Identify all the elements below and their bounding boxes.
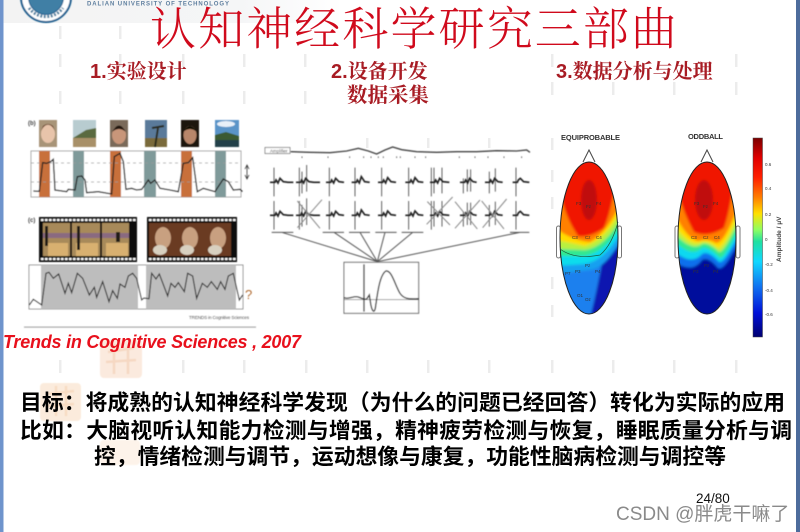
colour bar: -0.4	[765, 288, 773, 293]
figure b label: (b)	[28, 121, 36, 127]
university logo	[21, 0, 71, 22]
colour bar: 0.4	[765, 186, 772, 191]
colour bar: 0	[765, 237, 768, 242]
header band	[3, 0, 343, 23]
epoch verticals	[274, 165, 516, 230]
map title: equiprobable: EQUIPROBABLE	[561, 133, 620, 142]
citation: Trends in Cognitive Sciences , 2007	[3, 332, 302, 352]
electrodes: Fz	[703, 204, 709, 209]
step 3 heading: 3.数据分析与处理	[556, 59, 713, 83]
electrodes: C4	[714, 235, 720, 240]
electrodes: P3	[693, 269, 699, 274]
contour lines and electrodes: F3	[576, 201, 582, 206]
colour bar: 0.6	[765, 162, 772, 167]
panel: acquisition	[265, 147, 530, 313]
averaging lines	[272, 232, 529, 262]
colour bar: 0.2	[765, 212, 772, 217]
panel: experiment design	[24, 120, 256, 328]
colour bar: Amplitude / μV	[776, 216, 783, 262]
examples line 2: 控，情绪检测与调节，运动想像与康复，功能性脑病检测与调控等	[94, 444, 726, 469]
background watermark ticks	[59, 26, 738, 373]
goal line: 目标：将成熟的认知神经科学发现（为什么的问题已经回答）转化为实际的应用	[20, 390, 785, 415]
line chart b	[31, 151, 249, 197]
colour bar	[753, 138, 783, 337]
title: 认知神经科学研究三部曲	[150, 4, 677, 55]
electrodes: Cz	[703, 235, 709, 240]
electrodes: F3	[694, 201, 700, 206]
step 2 heading	[331, 60, 429, 107]
contour lines and electrodes: P3	[575, 269, 581, 274]
electrodes: P4	[713, 269, 719, 274]
electrodes: F4	[713, 201, 719, 206]
contour lines and electrodes: Cz	[585, 235, 591, 240]
averaged ERP	[344, 262, 419, 313]
source caption: TRENDS in Cognitive Sciences	[189, 315, 250, 320]
contour lines and electrodes: P7	[565, 271, 571, 276]
CSDN watermark: CSDN @胖虎干嘛了	[616, 503, 789, 525]
figure c label: (c)	[28, 218, 35, 224]
contour lines and electrodes: F4	[596, 201, 602, 206]
amplifier box	[265, 148, 290, 154]
university name: DALIAN UNIVERSITY OF TECHNOLOGY	[87, 2, 229, 8]
divider	[24, 326, 256, 328]
page number: 24/80	[696, 491, 730, 506]
film strips	[39, 217, 237, 262]
rejected epoch crosses	[297, 197, 507, 229]
amplifier box: Amplifier	[270, 148, 288, 154]
seal watermarks	[40, 340, 142, 465]
contour lines and electrodes: O1	[577, 293, 584, 298]
contour lines and electrodes: Oz	[585, 297, 592, 302]
colour bar: -0.6	[765, 312, 773, 317]
continuous EEG	[291, 147, 530, 154]
head map: equiprobable	[556, 150, 622, 318]
panel: topographic maps	[556, 132, 783, 337]
examples line 1: 比如：大脑视听认知能力检测与增强，精神疲劳检测与恢复，睡眠质量分析与调	[20, 418, 792, 443]
event markers	[302, 156, 522, 158]
contour lines and electrodes: Fz	[586, 204, 592, 209]
line chart c	[29, 265, 252, 309]
step 2 heading: 数据采集	[347, 84, 429, 107]
line chart c: ?	[245, 287, 252, 302]
head map: oddball	[675, 150, 741, 316]
contour lines and electrodes	[560, 201, 618, 302]
electrodes: Pz	[704, 263, 710, 268]
map title: oddball: ODDBALL	[688, 132, 723, 141]
contour lines and electrodes: P4	[595, 269, 601, 274]
goal and examples text	[20, 390, 792, 469]
contour lines and electrodes: C3	[572, 235, 578, 240]
stimulus photos	[39, 120, 239, 147]
colour bar: -0.2	[765, 262, 773, 267]
step 1 heading: 1.实验设计	[90, 60, 187, 83]
electrodes	[691, 201, 720, 274]
epoch traces	[270, 177, 529, 216]
step 2 heading: 2.设备开发	[331, 60, 428, 83]
contour lines and electrodes: Pz	[585, 263, 591, 268]
electrodes: C3	[691, 235, 697, 240]
contour lines and electrodes: C4	[596, 235, 602, 240]
